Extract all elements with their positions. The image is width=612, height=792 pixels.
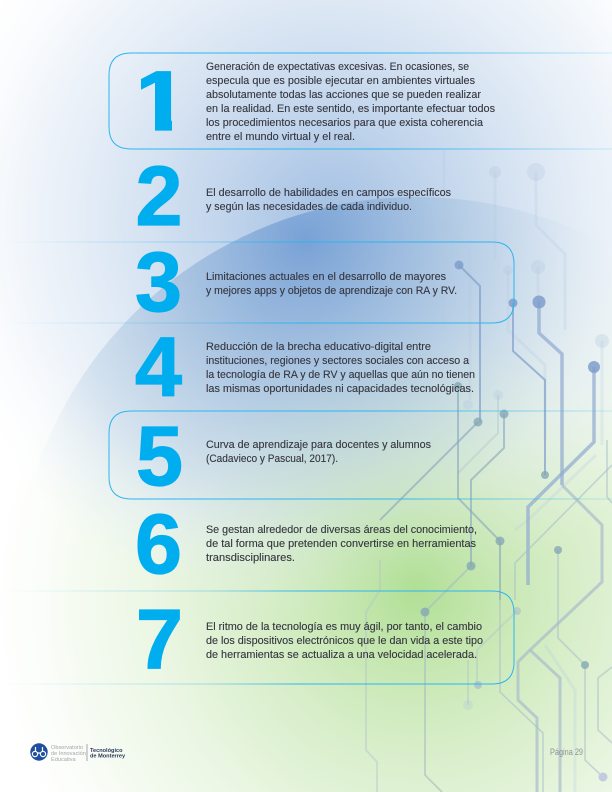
text block: item 5 <box>206 439 431 465</box>
text block: item 6: de tal forma que pretenden convertirse en herramientas <box>206 538 476 550</box>
text block: item 5: Curva de aprendizaje para docentes y alumnos <box>206 439 431 451</box>
panel outline: item 1 <box>109 53 612 149</box>
logo text: observatorio: de Innovación <box>51 751 86 757</box>
number 7: 7 <box>136 592 183 686</box>
text block: item 4 <box>206 341 475 395</box>
number 2: 2 <box>136 149 182 243</box>
panel outline: item 7 <box>0 591 514 684</box>
text block: item 7 <box>206 621 483 661</box>
text block: item 1: en la realidad. En este sentido, es importante efectuar todos <box>206 103 495 115</box>
number 6: 6 <box>135 497 182 591</box>
text block: item 3: Limitaciones actuales en el desarrollo de mayores <box>206 271 446 283</box>
text block: item 6: transdisciplinares. <box>206 552 295 564</box>
text block: item 1 <box>206 61 495 143</box>
text block: item 4: instituciones, regiones y sectores sociales con acceso a <box>206 355 469 367</box>
logo text: observatorio: Educativa <box>51 757 76 763</box>
footer logo <box>30 743 126 763</box>
number 4: 4 <box>135 320 182 414</box>
text block: item 2 <box>206 187 451 213</box>
logo text: tecnologico: de Monterrey <box>90 754 126 760</box>
text block: item 3: y mejores apps y objetos de aprendizaje con RA y RV. <box>206 285 457 297</box>
text block: item 4: Reducción de la brecha educativo-digital entre <box>206 341 431 353</box>
number 5: 5 <box>136 409 183 503</box>
text block: item 1: especula que es posible ejecutar en ambientes virtuales <box>206 75 475 87</box>
panel outline: item 5 <box>109 411 612 499</box>
text block: item 3 <box>206 271 457 297</box>
logo text: tecnologico: Tecnológico <box>90 748 123 754</box>
text block: item 5: (Cadavieco y Pascual, 2017). <box>206 453 338 465</box>
text block: item 7: de herramientas se actualiza a una velocidad acelerada. <box>206 649 477 661</box>
text block: item 1: Generación de expectativas excesivas. En ocasiones, se <box>206 61 469 73</box>
number 1: 1 <box>131 54 190 148</box>
number 3: 3 <box>135 235 182 329</box>
logo text: tecnologico <box>90 748 126 760</box>
text block: item 2: y según las necesidades de cada individuo. <box>206 201 412 213</box>
text block: item 4: las mismas oportunidades ni capacidades tecnológicas. <box>206 383 474 395</box>
panel outline: item 3 <box>0 242 514 323</box>
text block: item 1: los procedimientos necesarios para que exista coherencia <box>206 117 483 129</box>
circuit traces <box>366 150 612 792</box>
logo text: observatorio: Observatorio <box>51 745 83 751</box>
text block: item 2: El desarrollo de habilidades en campos específicos <box>206 187 451 199</box>
text block: item 7: de los dispositivos electrónicos que le dan vida a este tipo <box>206 635 483 647</box>
text block: item 7: El ritmo de la tecnología es muy ágil, por tanto, el cambio <box>206 621 482 633</box>
icon: observatory binoculars <box>30 743 48 761</box>
text block: item 6: Se gestan alrededor de diversas áreas del conocimiento, <box>206 524 477 536</box>
page number: Página 29 <box>550 747 583 757</box>
text block: item 6 <box>206 524 477 564</box>
text block: item 1: entre el mundo virtual y el real. <box>206 131 355 143</box>
logo text: observatorio <box>51 745 86 763</box>
text block: item 1: absolutamente todas las acciones que se pueden realizar <box>206 89 481 101</box>
text block: item 4: la tecnología de RA y de RV y aquellas que aún no tienen <box>206 369 475 381</box>
